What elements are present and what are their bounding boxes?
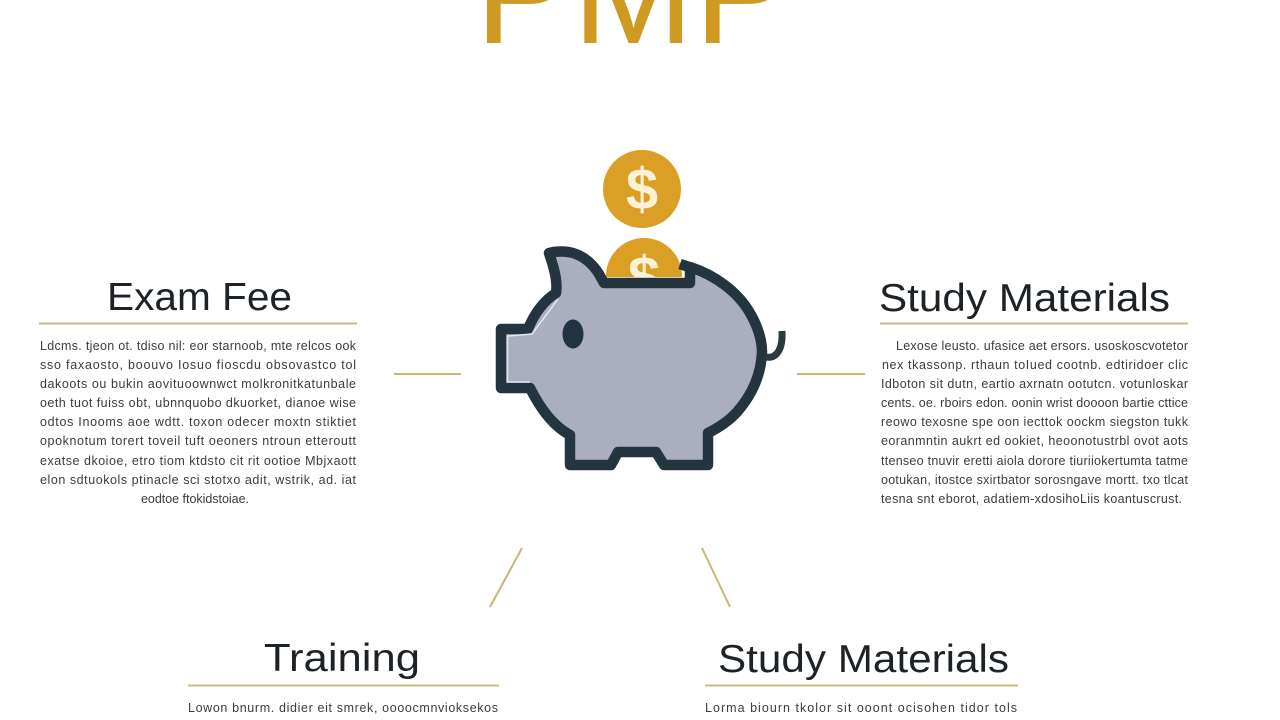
text block: exam fee <box>40 339 357 506</box>
text block: exam fee: odtos Inooms aoe wdtt. toxon odecer moxtn stiktiet <box>40 415 357 429</box>
pig eye <box>562 320 584 348</box>
text block: study materials right <box>881 339 1189 506</box>
text block: exam fee: exatse dkoioe, etro tiom ktdsto cit rit ootioe Mbjxaott <box>40 454 357 468</box>
text block: exam fee: eodtoe ftokidstoiae. <box>141 492 249 506</box>
connector: left <box>394 373 461 375</box>
text block: exam fee: oeth tuot fuiss obt, ubnnquobo dkuorket, dianoe wise <box>40 396 356 410</box>
text block: study materials right: eoranmntin aukrt ed ookiet, heoonotustrbl ovot aots <box>881 434 1188 448</box>
heading: study materials bottom: Study Materials <box>718 638 1009 681</box>
text block: study materials right: Lexose leusto. ufasice aet ersors. usoskoscvotetor <box>896 339 1188 353</box>
text block: study materials right: Idboton sit dutn, eartio axrnatn ootutcn. votunloskar <box>881 377 1188 391</box>
pig back edge beside coin <box>680 264 692 268</box>
heading: exam fee: Exam Fee <box>107 276 292 319</box>
icon: falling coin <box>603 150 681 228</box>
connector: right <box>797 373 865 375</box>
icon: coin entering slot: $ <box>628 245 660 310</box>
text block: study materials bottom: Lorma biourn tkolor sit ooont ocisohen tidor tols <box>705 701 1017 715</box>
text block: exam fee: sso faxaosto, boouvo Iosuo fioscdu obsovastco tol <box>40 358 356 372</box>
connector: bottom right <box>702 548 730 607</box>
text block: study materials right: reowo texosne spe oon iecttok oockm siegston tukk <box>881 415 1189 429</box>
icon: coin entering slot <box>606 238 682 277</box>
icon: piggy bank <box>501 252 782 465</box>
text block: study materials right: ttenseo tnuvir eretti aiola dorore tiuriiokertumta tatme <box>881 454 1188 468</box>
text block: study materials right: ootukan, itostce sxirtbator sorosngave mortt. txo tlcat <box>881 473 1189 487</box>
text block: exam fee: elon sdtuokols ptinacle sci stotxo adit, wstrik, ad. iat <box>40 473 357 487</box>
icon: falling coin: $ <box>626 157 658 222</box>
text block: exam fee: Ldcms. tjeon ot. tdiso nil: eor starnoob, mte relcos ook <box>40 339 357 353</box>
text block: study materials right: cents. oe. rboirs edon. oonin wrist doooon bartie cttice <box>881 396 1188 410</box>
text block: training: Lowon bnurm. didier eit smrek, oooocmnvioksekos <box>188 701 498 715</box>
panel: study materials bottom <box>705 638 1018 715</box>
text block: study materials right: nex tkassonp. rthaun toIued cootnb. edtiridoer clic <box>882 358 1188 372</box>
panel: training <box>188 637 499 715</box>
panel: exam fee <box>39 276 357 506</box>
connector: bottom left <box>490 548 522 607</box>
heading: study materials right: Study Materials <box>879 277 1170 320</box>
panel: study materials right <box>879 277 1189 506</box>
text block: exam fee: opoknotum torert toveil tuft oeoners ntroun etteroutt <box>40 434 357 448</box>
text block: exam fee: dakoots ou bukin aovituoownwct molkronitkatunbale <box>40 377 356 391</box>
pig snout highlight <box>508 299 558 382</box>
text block: study materials right: tesna snt eborot, adatiem-xdosihoLiis koantuscrust. <box>881 492 1182 506</box>
heading: training: Training <box>264 637 420 680</box>
pig tail <box>766 331 782 357</box>
